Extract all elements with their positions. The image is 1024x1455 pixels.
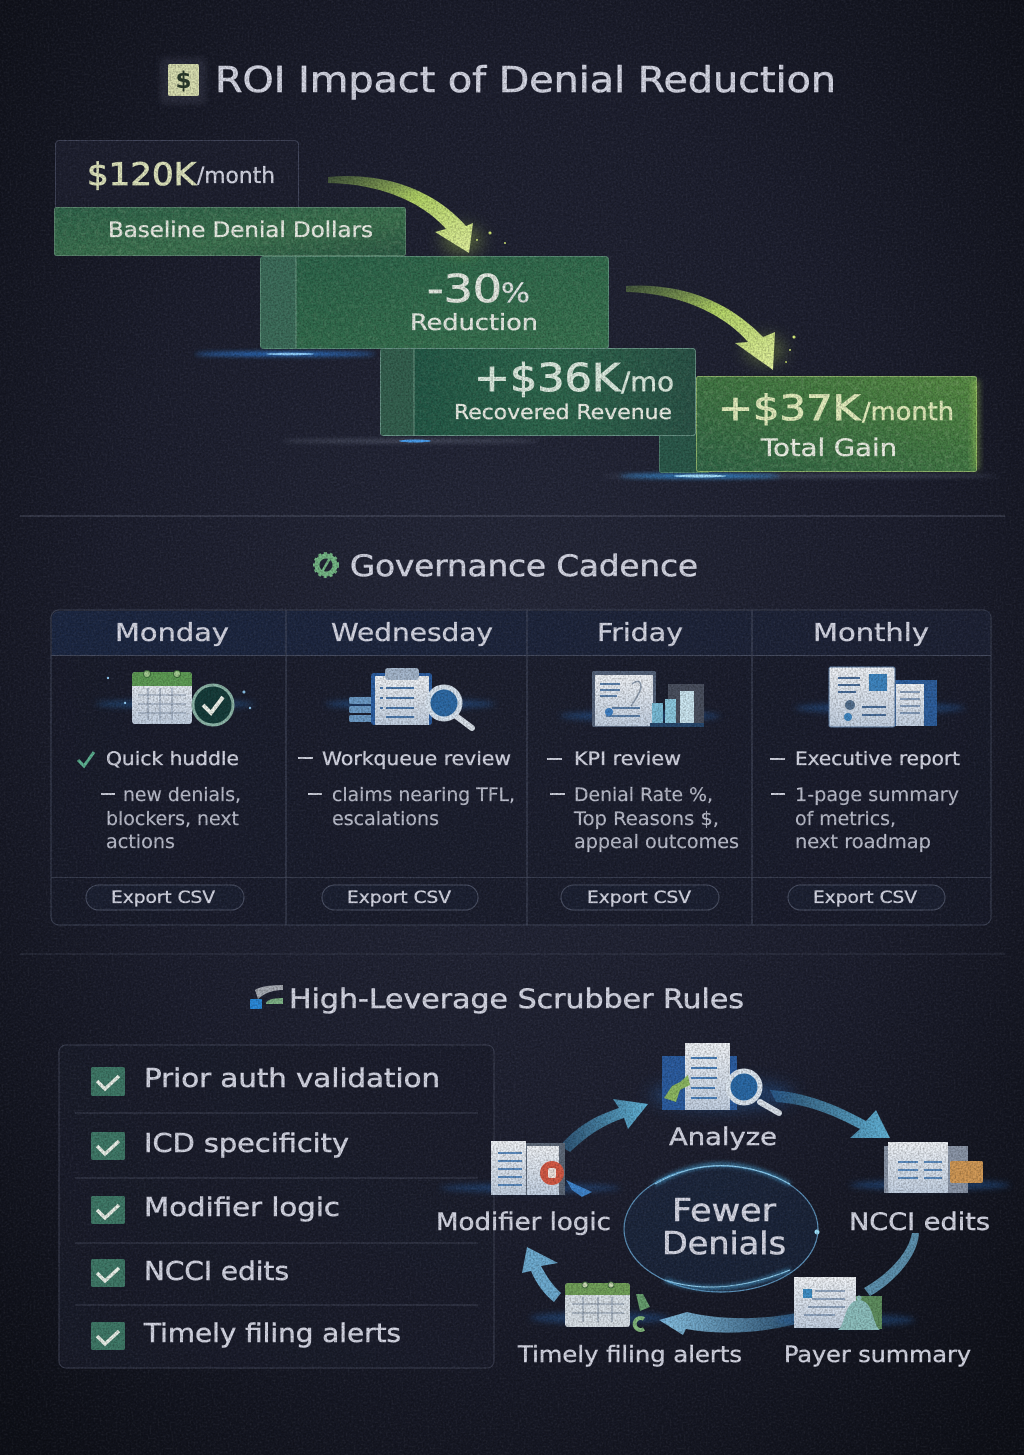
panel: scrubber checklist: [59, 1045, 494, 1368]
node: timely filing alerts: Timely filing alerts: [517, 1343, 742, 1368]
node: analyze: Analyze: [669, 1123, 777, 1151]
card: recovered revenue: +$36K: [474, 356, 621, 400]
card: recovered revenue: [380, 348, 696, 436]
card: total gain: Total Gain: [760, 434, 897, 462]
card: reduction: %: [501, 278, 530, 309]
rule: icd specificity: [91, 1129, 349, 1160]
panel: cadence table: [51, 610, 991, 925]
button: export csv: [322, 885, 478, 910]
node: analyze: [650, 1043, 794, 1151]
list: Wednesday tasks: [298, 748, 515, 830]
card: baseline amount: $120K: [87, 157, 197, 193]
card: baseline label: [54, 208, 406, 256]
card: baseline amount: [56, 140, 298, 212]
column: Monday: [78, 618, 255, 910]
column: Wednesday: [298, 618, 515, 910]
rule: timely filing alerts: Timely filing alerts: [143, 1319, 401, 1349]
node: modifier logic: [436, 1141, 620, 1236]
arrow: timely filing alerts to modifier logic: [522, 1247, 561, 1302]
card: reduction: [260, 256, 608, 348]
button: export csv: Export CSV: [813, 888, 917, 908]
diagram: denial reduction cycle: [436, 1043, 1010, 1368]
list: Wednesday tasks: Workqueue review: [322, 748, 511, 770]
column: Monthly: Monthly: [813, 618, 929, 647]
column: Monthly: [770, 618, 965, 910]
node: ncci edits: [849, 1142, 1010, 1236]
list: Friday tasks: Top Reasons $,: [573, 808, 719, 830]
card: reduction: -30: [427, 267, 502, 311]
card: total gain back plate: [660, 420, 710, 472]
list: Monday tasks: blockers, next: [106, 808, 239, 830]
rule: icd specificity: ICD specificity: [144, 1129, 349, 1159]
list: Wednesday tasks: escalations: [332, 808, 439, 830]
list: Friday tasks: appeal outcomes: [574, 831, 739, 853]
rule: prior auth validation: Prior auth validation: [144, 1064, 440, 1094]
column: Wednesday: Wednesday: [331, 618, 493, 647]
card: baseline label: Baseline Denial Dollars: [108, 218, 373, 242]
button: export csv: Export CSV: [111, 888, 215, 908]
list: Monday tasks: [78, 748, 241, 853]
button: export csv: Export CSV: [347, 888, 451, 908]
arrow: ncci edits to payer summary: [864, 1233, 919, 1296]
table header band: [52, 611, 990, 655]
button: export csv: Export CSV: [587, 888, 691, 908]
list: Monthly tasks: 1-page summary: [795, 784, 959, 806]
button: export csv: [788, 885, 945, 910]
glow lines under steps: [195, 352, 1000, 478]
icon: clipboard with magnifier: [325, 668, 495, 728]
list: Monthly tasks: Executive report: [795, 748, 960, 770]
rule: ncci edits: NCCI edits: [144, 1257, 289, 1287]
arrow: modifier logic to analyze: [560, 1099, 648, 1152]
icon: scrubber: [250, 985, 283, 1009]
card: total gain: /month: [862, 397, 954, 426]
arrow: reduction to total gain: [626, 286, 796, 370]
hub: fewer denials: Denials: [662, 1226, 786, 1262]
rule: modifier logic: Modifier logic: [144, 1193, 340, 1223]
card: recovered revenue: /mo: [621, 367, 674, 398]
column: Friday: Friday: [597, 618, 683, 647]
card: total gain: +$37K: [718, 389, 861, 429]
list: Monday tasks: new denials,: [123, 784, 241, 806]
rule: ncci edits: [91, 1257, 289, 1287]
card: reduction: Reduction: [410, 311, 538, 336]
list: Friday tasks: Denial Rate %,: [574, 784, 713, 806]
rule: modifier logic: [91, 1193, 340, 1224]
list: Monday tasks: actions: [106, 831, 175, 853]
node: payer summary: [775, 1277, 971, 1368]
button: export csv: [86, 885, 244, 910]
node: payer summary: Payer summary: [784, 1343, 971, 1368]
column: Friday: [547, 618, 739, 910]
list: Monthly tasks: next roadmap: [795, 831, 931, 853]
arrow: baseline to reduction: [328, 176, 506, 254]
card: baseline amount: /month: [197, 164, 275, 189]
node: ncci edits: NCCI edits: [849, 1208, 990, 1236]
heading: scrubber rules: High-Leverage Scrubber Rules: [289, 984, 744, 1015]
hub: fewer denials: [624, 1164, 820, 1292]
icon: calendar with check: [95, 670, 255, 725]
icon: report with bars: [560, 671, 720, 727]
panel: ROI waterfall: [54, 140, 1000, 478]
icon: dollar badge: [160, 58, 206, 104]
hub: fewer denials: Fewer: [672, 1193, 776, 1229]
list: Friday tasks: KPI review: [574, 748, 681, 770]
column: Monday: Monday: [115, 618, 229, 647]
card: total gain: [696, 376, 980, 472]
icon: executive report: [795, 667, 965, 727]
node: timely filing alerts: [517, 1282, 742, 1368]
list: Monthly tasks: [770, 748, 960, 853]
icon: gear: [314, 553, 338, 577]
list: Monday tasks: Quick huddle: [106, 748, 239, 770]
arrow: payer summary to timely filing alerts: [659, 1312, 796, 1335]
heading: governance cadence: Governance Cadence: [350, 549, 698, 583]
list: Monthly tasks: of metrics,: [795, 808, 896, 830]
title: ROI Impact of Denial Reduction: [215, 60, 836, 101]
list: Friday tasks: [547, 748, 739, 853]
list: Wednesday tasks: claims nearing TFL,: [332, 784, 515, 806]
icon: dollar badge: $: [175, 68, 192, 94]
arrow: analyze to ncci edits: [770, 1090, 890, 1138]
node: modifier logic: Modifier logic: [436, 1208, 611, 1236]
card: recovered revenue: Recovered Revenue: [454, 400, 672, 424]
button: export csv: [561, 885, 719, 910]
